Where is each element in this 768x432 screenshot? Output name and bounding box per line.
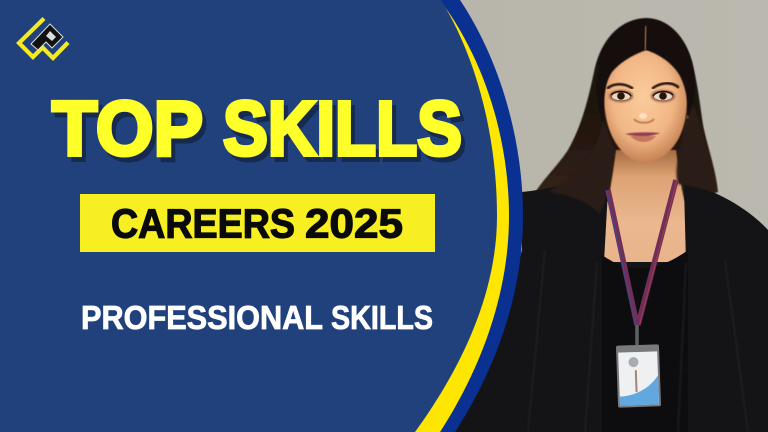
nose xyxy=(634,113,654,123)
professional skills text: SKILLS xyxy=(331,299,433,336)
robe xyxy=(450,178,768,432)
yellow arc band xyxy=(405,0,509,432)
hair back xyxy=(533,18,718,212)
banner text: CAREERS xyxy=(111,200,295,246)
logo yellow mark xyxy=(19,18,68,58)
neck and chest xyxy=(600,150,690,270)
eyes xyxy=(609,90,675,102)
hair strands right xyxy=(676,105,716,192)
title shadow: SKILLS xyxy=(227,91,466,177)
black top xyxy=(602,250,688,432)
subtitle banner xyxy=(80,194,435,252)
hair front xyxy=(597,19,695,122)
logo P mark xyxy=(31,24,63,50)
title shadow: TOP xyxy=(56,91,207,177)
outer blue arc band xyxy=(410,0,523,432)
ID badge xyxy=(616,344,661,408)
photo: student portrait xyxy=(430,0,768,432)
title: TOP xyxy=(52,86,203,172)
face xyxy=(604,50,687,162)
professional skills text: PROFESSIONAL xyxy=(81,299,323,336)
logo xyxy=(19,18,68,58)
eyebrows xyxy=(608,83,678,88)
robe folds xyxy=(528,250,748,432)
photo background xyxy=(430,0,768,432)
lanyard clip xyxy=(635,325,639,345)
banner background xyxy=(80,194,435,252)
ear stud xyxy=(685,115,689,119)
title shadow xyxy=(56,91,466,177)
lanyard xyxy=(606,180,677,325)
left navy panel xyxy=(0,0,497,432)
hair part xyxy=(645,26,646,50)
banner text: 2025 xyxy=(305,200,403,246)
banner text xyxy=(111,200,403,246)
title: SKILLS xyxy=(223,86,462,172)
mouth xyxy=(625,132,660,142)
hair strands left xyxy=(548,120,614,214)
title xyxy=(52,86,462,172)
